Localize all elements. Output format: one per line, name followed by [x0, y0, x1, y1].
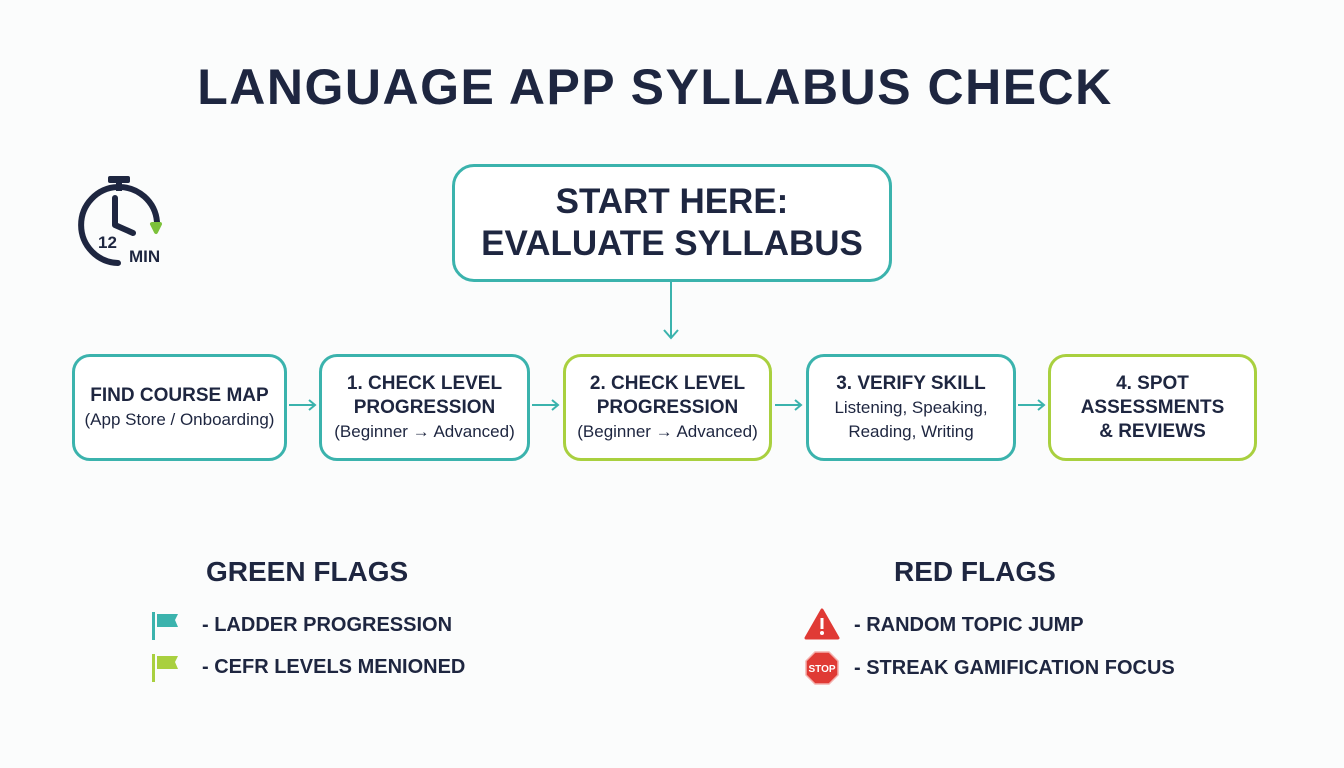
heading: red flags: RED FLAGS: [894, 556, 1056, 587]
step 1: FIND COURSE MAP: [90, 384, 269, 406]
heading: green flags: GREEN FLAGS: [206, 556, 408, 587]
item: streak gamification: STOP: [808, 664, 836, 675]
item: ladder progression: [152, 612, 452, 640]
item: streak gamification: - STREAK GAMIFICATION FOCUS: [854, 656, 1175, 678]
panel: green flags: [152, 556, 465, 682]
item: ladder progression: - LADDER PROGRESSION: [202, 614, 452, 636]
step 4: [806, 354, 1016, 461]
step 4: Listening, Speaking,: [834, 398, 988, 416]
step 4: 3. VERIFY SKILL: [836, 372, 986, 394]
item: cefr: - CEFR LEVELS MENIONED: [202, 656, 465, 678]
step 5: ASSESSMENTS: [1081, 396, 1224, 418]
step 3: 2. CHECK LEVEL: [590, 372, 745, 394]
step 5: 4. SPOT: [1116, 372, 1189, 394]
item: cefr: [152, 654, 465, 682]
arrow 2: [532, 399, 560, 411]
step 1: [72, 354, 287, 461]
arrow 4: [1018, 399, 1046, 411]
step 1: (App Store / Onboarding): [85, 410, 274, 428]
arrow: down: [663, 282, 679, 340]
start box: EVALUATE SYLLABUS: [481, 224, 863, 263]
step 3: (Beginner → Advanced): [577, 422, 758, 440]
arrow 1: [289, 399, 316, 411]
step 2: PROGRESSION: [354, 396, 495, 418]
step 5: & REVIEWS: [1099, 420, 1206, 442]
title: LANGUAGE APP SYLLABUS CHECK: [197, 59, 1113, 115]
step 4: Reading, Writing: [848, 422, 974, 440]
step 3: PROGRESSION: [597, 396, 738, 418]
step 2: [319, 354, 530, 461]
icon: stopwatch 12 min: MIN: [129, 247, 160, 266]
item: random topic jump: [804, 608, 1084, 640]
arrow 3: [775, 399, 802, 411]
icon: stopwatch 12 min: 12: [98, 233, 117, 252]
step 5: [1048, 354, 1257, 461]
item: random topic jump: - RANDOM TOPIC JUMP: [854, 614, 1084, 636]
icon: stopwatch 12 min: [78, 176, 162, 266]
start box: START HERE:: [556, 182, 788, 221]
step 3: [563, 354, 772, 461]
step 2: 1. CHECK LEVEL: [347, 372, 502, 394]
panel: red flags: [804, 556, 1175, 685]
step 2: (Beginner → Advanced): [334, 422, 515, 440]
start box: [452, 164, 892, 282]
item: streak gamification: [805, 651, 1175, 685]
